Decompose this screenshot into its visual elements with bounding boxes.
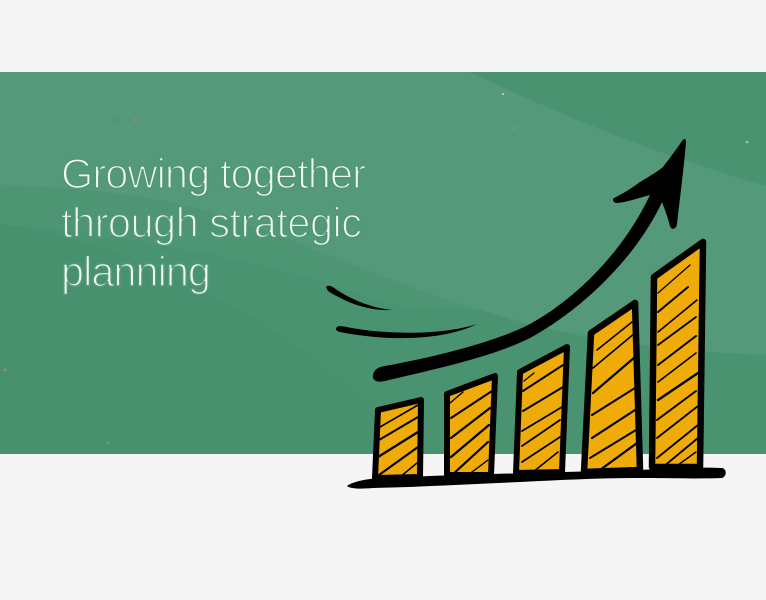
title (61, 150, 366, 295)
title: through strategic (61, 199, 362, 246)
title: Growing together (61, 150, 366, 197)
motion lines (326, 286, 477, 338)
bar 4 (584, 303, 640, 472)
title: planning (61, 248, 211, 295)
bar 3 (516, 347, 567, 473)
bar 2 (447, 376, 495, 475)
bar chart (347, 242, 726, 489)
bar 1 (375, 400, 421, 478)
growth arrow (373, 139, 686, 382)
baseline (347, 468, 726, 489)
bar 5 (652, 242, 703, 467)
green banner background (0, 72, 766, 454)
